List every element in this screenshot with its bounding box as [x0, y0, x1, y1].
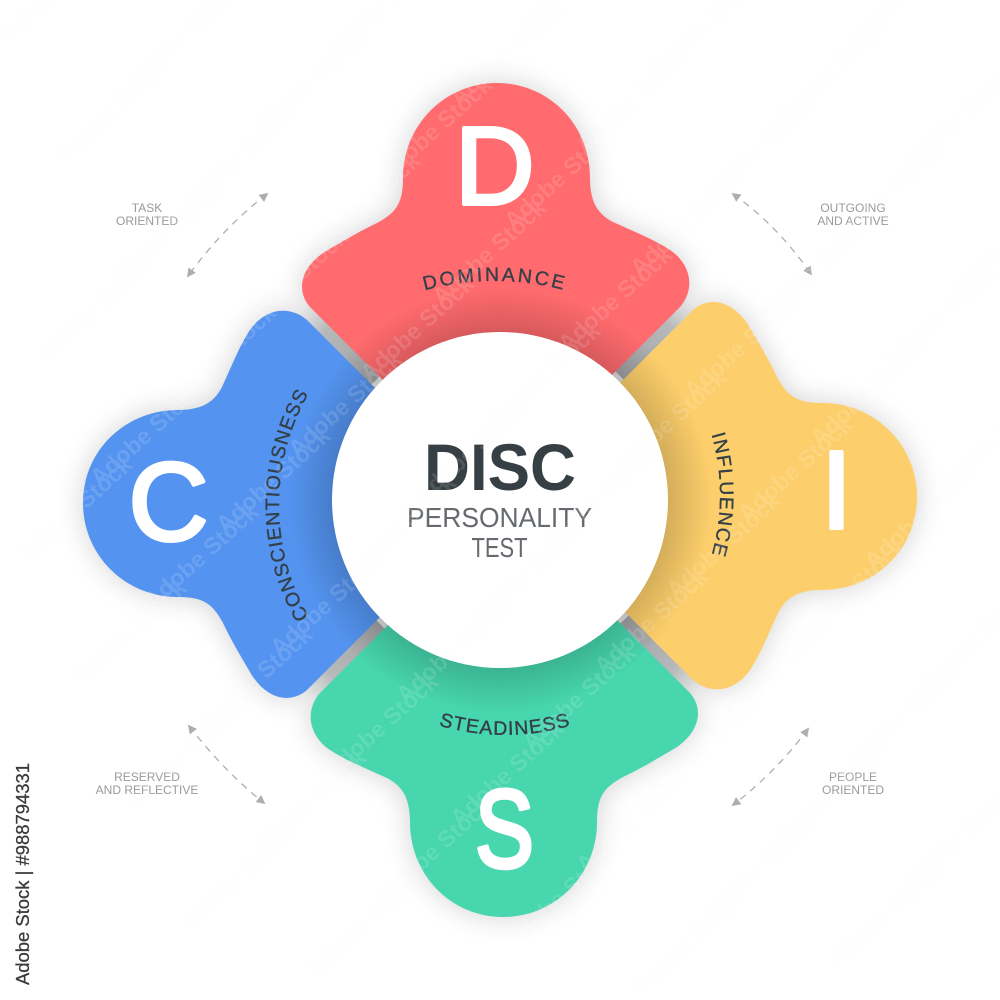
watermark pattern: Adobe Stock [823, 856, 948, 972]
gray gaps between petals [304, 304, 696, 696]
watermark pattern: Adobe Stock [805, 335, 930, 451]
watermark pattern: Adobe Stock [211, 422, 336, 538]
watermark pattern: Adobe Stock [553, 241, 678, 357]
watermark pattern: Adobe Stock [229, 223, 354, 339]
watermark pattern: Adobe Stock [715, 610, 840, 726]
note: people oriented: ORIENTED [822, 783, 884, 797]
note: people oriented [822, 770, 884, 797]
note: reserved and reflective [96, 770, 198, 797]
note: task oriented [116, 201, 178, 228]
watermark pattern: Adobe Stock [427, 194, 552, 310]
watermark pattern: Adobe Stock [769, 733, 894, 849]
watermark pattern: Adobe Stock [13, 451, 138, 567]
watermark pattern: Adobe Stock [625, 165, 750, 281]
label: Influence: INFLUENCE [712, 432, 734, 557]
watermark pattern: Adobe Stock [373, 71, 498, 187]
watermark pattern: Adobe Stock [589, 563, 714, 679]
arrow: top right [733, 194, 811, 274]
watermark pattern: Adobe Stock [517, 639, 642, 755]
watermark pattern: Adobe Stock [139, 498, 264, 614]
watermark pattern: Adobe Stock [859, 458, 984, 574]
note: outgoing and active: AND ACTIVE [817, 214, 889, 228]
panel: D petal [302, 83, 689, 500]
watermark pattern: Adobe Stock [175, 820, 300, 936]
arrow: bottom right [733, 729, 808, 805]
label: Steadiness: STEADINESS [440, 714, 569, 735]
watermark pattern: Adobe Stock [481, 317, 606, 433]
watermark pattern: Adobe Stock [265, 545, 390, 661]
centre circle [332, 332, 668, 668]
watermark pattern: Adobe Stock [697, 89, 822, 205]
note: task oriented: TASK [132, 201, 162, 215]
watermark pattern: Adobe Stock [337, 469, 462, 585]
watermark pattern: Adobe Stock [571, 42, 696, 158]
letter C: C [129, 441, 208, 564]
watermark pattern: Adobe Stock [31, 252, 156, 368]
letter S: S [475, 769, 534, 891]
watermark pattern: Adobe Stock [445, 715, 570, 831]
subtitle: Personality Test: PERSONALITY [407, 502, 592, 533]
note: task oriented: ORIENTED [116, 214, 178, 228]
letter I: I [821, 429, 852, 552]
watermark pattern: Adobe Stock [157, 299, 282, 415]
watermark pattern: Adobe Stock [67, 574, 192, 690]
watermark pattern: Adobe Stock [877, 259, 1000, 375]
watermark pattern: Adobe Stock [751, 212, 876, 328]
watermark pattern: Adobe Stock [679, 288, 804, 404]
watermark pattern: Adobe Stock [661, 487, 786, 603]
subtitle: Personality Test [407, 502, 592, 563]
watermark pattern: Adobe Stock [625, 885, 750, 1000]
watermark pattern: Adobe Stock [355, 270, 480, 386]
watermark pattern: Adobe Stock [733, 411, 858, 527]
subtitle: Personality Test: TEST [472, 532, 528, 563]
note: people oriented: PEOPLE [829, 770, 877, 784]
note: outgoing and active [817, 201, 889, 228]
watermark pattern: Adobe Stock [301, 867, 426, 983]
watermark pattern: Adobe Stock [571, 762, 696, 878]
watermark pattern: Adobe Stock [499, 838, 624, 954]
label: Conscientiousness: CONSCIENTIOUSNESS [265, 390, 307, 620]
watermark pattern: Adobe Stock [283, 346, 408, 462]
watermark pattern: Adobe Stock [697, 809, 822, 925]
watermark pattern: Adobe Stock [391, 592, 516, 708]
watermark pattern: Adobe Stock [463, 516, 588, 632]
watermark pattern: Adobe Stock [787, 534, 912, 650]
watermark pattern: Adobe Stock [121, 697, 246, 813]
inner shadow around centre circle [288, 288, 712, 712]
watermark pattern: Adobe Stock [607, 364, 732, 480]
watermark pattern: Adobe Stock [175, 100, 300, 216]
watermark pattern: Adobe Stock [301, 147, 426, 263]
title: DISC: DISC [424, 430, 576, 504]
watermark pattern: Adobe Stock [103, 176, 228, 292]
panel: C petal [83, 311, 500, 698]
watermark pattern: Adobe Stock [535, 440, 660, 556]
watermark pattern: Adobe Stock [823, 136, 948, 252]
note: reserved and reflective: AND REFLECTIVE [96, 783, 198, 797]
arrow: top left [188, 194, 267, 276]
watermark pattern: Adobe Stock [769, 13, 894, 129]
watermark pattern: Adobe Stock [193, 621, 318, 737]
stock id side label: Adobe Stock | #988794331 [13, 763, 33, 985]
watermark pattern: Adobe Stock [319, 668, 444, 784]
drop shadow under petals [83, 83, 917, 917]
letter D: D [455, 105, 534, 228]
watermark pattern: Adobe Stock [247, 24, 372, 140]
watermark pattern: Adobe Stock [409, 393, 534, 509]
watermark pattern: Adobe Stock [499, 118, 624, 234]
watermark pattern: Adobe Stock [373, 791, 498, 907]
watermark pattern: Adobe Stock [643, 686, 768, 802]
note: reserved and reflective: RESERVED [114, 770, 180, 784]
watermark pattern: Adobe Stock [841, 657, 966, 773]
panel: I petal [500, 302, 917, 689]
watermark pattern: Adobe Stock [85, 375, 210, 491]
label: Dominance: DOMINANCE [422, 267, 565, 290]
note: outgoing and active: OUTGOING [820, 201, 886, 215]
arrow: bottom left [189, 726, 264, 803]
watermark pattern: Adobe Stock [49, 53, 174, 169]
panel: S petal [311, 500, 698, 917]
watermark pattern: Adobe Stock [247, 744, 372, 860]
